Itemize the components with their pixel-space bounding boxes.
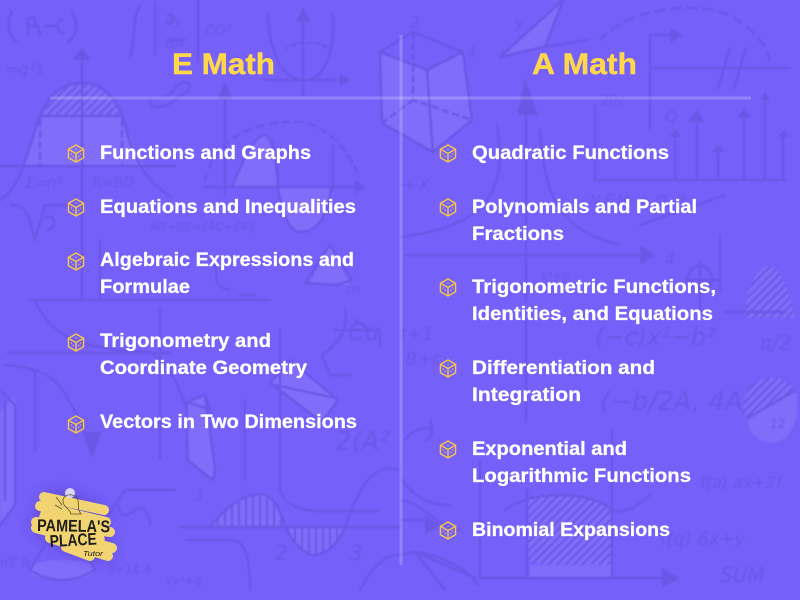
background math doodles: 3: [350, 541, 363, 565]
logo: Pamela's Place Tutor: [32, 488, 115, 560]
background math doodles: N F M₀ > Q꜀ P: [590, 193, 685, 209]
heading: A Math: A Math: [532, 48, 637, 81]
background math doodles: BA: [165, 36, 184, 52]
background math doodles: t+1: [400, 324, 434, 345]
background math doodles: SUM: [720, 563, 765, 587]
list item: Trigonometry and Coordinate Geometry: Coordinate Geometry: [100, 358, 307, 379]
background math doodles: 2: [275, 541, 288, 565]
list item: Differentiation and Integration: [440, 358, 655, 406]
background math doodles: (−b/2A, 4A): [600, 387, 753, 417]
background math doodles: Q: [665, 107, 678, 126]
background math doodles: (−c)x²−b²: [595, 323, 716, 351]
list item: Exponential and Logarithmic Functions: [440, 439, 691, 487]
logo: Pamela's Place Tutor: Tutor: [83, 551, 104, 558]
background math doodles: 4: [665, 250, 675, 269]
list item: Trigonometric Functions, Identities, and Equations: Trigonometric Functions,: [472, 277, 716, 298]
background math doodles: y: [514, 16, 524, 32]
background math doodles: x²+p: [539, 269, 570, 283]
background math doodles: √x²+q: [165, 574, 203, 588]
background math doodles: 4: [466, 43, 476, 62]
list item: Trigonometric Functions, Identities, and Equations: [440, 277, 716, 325]
background math doodles: 2: [410, 13, 420, 32]
list item: Trigonometry and Coordinate Geometry: [68, 331, 307, 379]
list item: Algebraic Expressions and Formulae: [68, 250, 354, 298]
background math doodles: 20c: [600, 93, 626, 109]
background math doodles: πT R: [0, 556, 31, 572]
background math doodles: 1: [195, 485, 205, 504]
list item: Differentiation and Integration: Differentiation and: [472, 358, 655, 379]
heading: E Math: E Math: [172, 48, 275, 81]
list item: Polynomials and Partial Fractions: [440, 197, 697, 245]
list item: Quadratic Functions: Quadratic Functions: [472, 143, 669, 164]
background math doodles: 3=11.4: [107, 562, 151, 576]
list item: Equations and Inequalities: Equations and Inequalities: [100, 197, 356, 218]
horizontal divider: [50, 96, 751, 100]
logo: Pamela's Place Tutor: PLACE: [49, 530, 97, 551]
list item: Polynomials and Partial Fractions: Fractions: [472, 224, 564, 245]
list item: Polynomials and Partial Fractions: Polynomials and Partial: [472, 197, 697, 218]
background math doodles: → X: [400, 175, 430, 194]
background math doodles: Σ=n¹: [25, 174, 63, 192]
list item: Vectors in Two Dimensions: Vectors in Two Dimensions: [100, 412, 357, 433]
list item: Trigonometric Functions, Identities, and Equations: Identities, and Equations: [472, 304, 713, 325]
background math doodles: π/2: [760, 331, 792, 355]
list item: Binomial Expansions: Binomial Expansions: [472, 520, 670, 541]
list item: Exponential and Logarithmic Functions: Exponential and: [472, 439, 627, 460]
vertical divider: [400, 35, 402, 565]
background math doodles: 2(A²: [335, 427, 390, 457]
list item: Trigonometry and Coordinate Geometry: Trigonometry and: [100, 331, 271, 352]
list item: Functions and Graphs: Functions and Graphs: [100, 143, 311, 164]
list item: Algebraic Expressions and Formulae: Algebraic Expressions and: [100, 250, 354, 271]
background math doodles: dy: [165, 13, 183, 29]
background math doodles: 12: [770, 417, 785, 431]
list item: Algebraic Expressions and Formulae: Formulae: [100, 277, 190, 298]
background math doodles: f(a) ax+2f: [700, 473, 784, 492]
panel: A Math: [440, 48, 716, 541]
background math doodles: 2f3: [345, 285, 361, 296]
list item: Differentiation and Integration: Integration: [472, 385, 581, 406]
background math doodles: R=BD: [92, 175, 134, 191]
background math doodles: AB+BE=[AC+DP]: [149, 220, 255, 234]
background math doodles: f(q) 6x+y: [660, 529, 746, 550]
background math doodles: Cu: [348, 318, 380, 346]
logo: Pamela's Place Tutor: PAMELA'S: [37, 516, 110, 536]
panel: E Math: [68, 48, 357, 433]
list item: Exponential and Logarithmic Functions: Logarithmic Functions: [472, 466, 691, 487]
background math doodles: CO²: [205, 23, 232, 39]
background math doodles: =q²1: [5, 60, 45, 79]
background math doodles: B+c: [405, 349, 442, 370]
